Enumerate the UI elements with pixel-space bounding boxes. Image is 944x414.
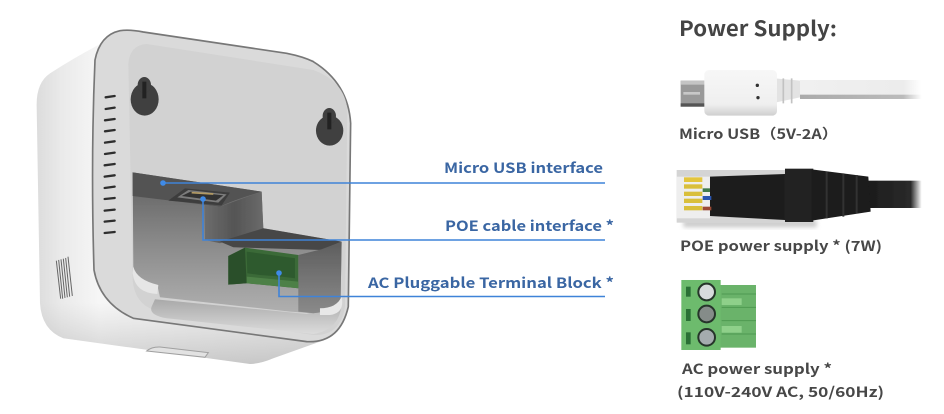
caption: AC power supply line 1: AC power supply * bbox=[681, 359, 832, 379]
device photo: back of white enclosure bbox=[37, 30, 351, 364]
device body bbox=[37, 30, 348, 364]
speaker grille bbox=[56, 257, 72, 299]
recess right wall bbox=[298, 242, 342, 313]
body lower shading bbox=[37, 210, 320, 364]
vent slots bbox=[105, 96, 115, 233]
recess ledge: USB port shelf bbox=[133, 172, 262, 207]
recess bbox=[133, 172, 342, 313]
label: POE cable interface: POE cable interface * bbox=[445, 215, 614, 236]
back face rim bbox=[93, 30, 351, 342]
back panel bbox=[128, 44, 347, 335]
icon: micro usb port bbox=[168, 188, 230, 205]
icon: green terminal block bbox=[228, 248, 298, 288]
white lip right bbox=[320, 297, 342, 315]
caption: POE power supply: POE power supply * (7W) bbox=[680, 236, 882, 256]
callout leader lines bbox=[163, 183, 605, 296]
heading: Power Supply: Power Supply: bbox=[679, 13, 837, 43]
icon: POE ethernet cable bbox=[677, 169, 922, 227]
lower tray bbox=[151, 299, 342, 334]
caption: Micro USB: Micro USB（5V-2A） bbox=[679, 124, 838, 144]
leader: micro usb bbox=[163, 182, 605, 184]
recess terminal shelf bbox=[220, 228, 342, 250]
leader dots bbox=[160, 180, 282, 276]
icon: green pluggable terminal bbox=[681, 280, 756, 350]
bottom slot bbox=[147, 347, 208, 357]
white lip left bbox=[133, 267, 158, 294]
leader: POE bbox=[203, 199, 605, 240]
caption: AC power supply line 2: (110V-240V AC, 50/60Hz) bbox=[677, 382, 884, 402]
leader: AC terminal bbox=[279, 273, 605, 296]
icon: keyhole right bbox=[316, 108, 343, 146]
label: Micro USB interface: Micro USB interface bbox=[444, 157, 603, 178]
label: AC Pluggable Terminal Block: AC Pluggable Terminal Block * bbox=[367, 272, 614, 293]
icon: keyhole left bbox=[131, 77, 159, 116]
icon: micro USB cable bbox=[681, 70, 922, 116]
recess side wall bbox=[205, 192, 263, 243]
